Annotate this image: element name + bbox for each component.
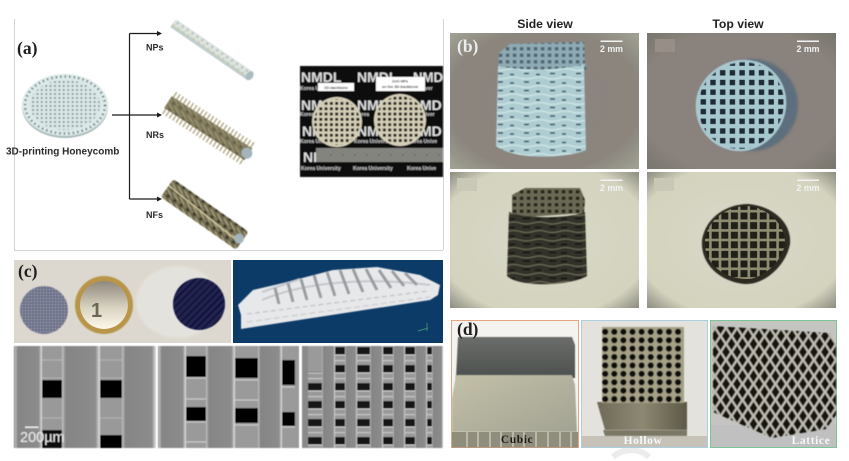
scale bar: 2 mm (797, 44, 820, 54)
photo: samples beside a coin: 1 (91, 300, 102, 322)
panel a frame (14, 19, 444, 250)
NRs label: NRs (146, 130, 164, 140)
photo: lattice sample (710, 320, 836, 448)
photo: NMDL printed disks: NM (301, 97, 323, 113)
caption: Lattice: Lattice (792, 435, 830, 447)
scale bar: 2 mm (600, 44, 623, 54)
photo: NMDL printed disks: Univer (417, 86, 433, 92)
photo: NMDL printed disks: NI (303, 149, 317, 165)
panel: a, synthesis schematic (6, 19, 444, 251)
photo: NMDL printed disks: NMD (357, 123, 389, 139)
arrows: branching to three morphologies (112, 31, 162, 202)
photo: NMDL printed disks: ZnO NPs (392, 80, 408, 84)
panel: c, printed samples and micrographs (14, 260, 443, 448)
photo: NMDL printed disks: Korea University (300, 139, 340, 145)
icon: honeycomb disk (22, 74, 108, 138)
photo: NMDL printed disks: MD (420, 123, 442, 139)
photo: NMDL printed disks: Korea (300, 112, 314, 118)
scale bar: 200 micrometres: 200µm (20, 430, 65, 446)
photo: blue lattice, top view (647, 33, 836, 169)
photo: NMDL printed disks: Korea Unive (407, 166, 436, 172)
photo: NMDL printed disks: NMDL (301, 69, 342, 85)
icon: nanoparticle rod (170, 19, 255, 82)
photo: NMDL printed disks: NMDL (357, 69, 398, 85)
photo: NMDL printed disks: MD (420, 97, 442, 113)
micrograph: lowest density (14, 346, 156, 448)
icon: nanorod brush (161, 91, 259, 167)
photo: NMDL printed disks: Univer (419, 112, 435, 118)
image: tomography render (233, 260, 443, 343)
watermark arc (613, 450, 649, 457)
scale bar: 2 mm (797, 183, 820, 193)
panel: b, side and top views (450, 17, 836, 308)
panel: d, cubic, hollow and lattice samples (452, 319, 836, 448)
photo: NMDL printed disks: Korea (355, 112, 369, 118)
photo: NMDL printed disks: Korea Unive (408, 139, 437, 145)
photo: NMDL printed disks: Korea University (353, 166, 393, 172)
panel label c: (c) (18, 261, 38, 281)
photo: cubic sample (452, 319, 578, 448)
photo: hollow sample (582, 320, 708, 448)
panel label a: (a) (17, 38, 38, 58)
caption: Hollow: Hollow (624, 435, 662, 447)
heading: Top view: Top view (712, 17, 764, 31)
photo: NMDL printed disks (300, 66, 443, 177)
scale bar: 2 mm (600, 183, 623, 193)
photo: NMDL printed disks: Korea University (354, 139, 394, 145)
photo: NMDL printed disks: Korea Univ (300, 86, 327, 92)
NPs label: NPs (146, 42, 164, 52)
photo: dark lattice, top view (647, 172, 836, 308)
caption: Cubic: Cubic (501, 434, 533, 446)
photo: NMDL printed disks: NMD (413, 69, 443, 85)
photo: blue lattice, side view (450, 33, 639, 169)
photo: NMDL printed disks: 3D-backbone (324, 86, 348, 90)
photo: NMDL printed disks: NMD (357, 97, 389, 113)
heading: Side view: Side view (517, 17, 573, 31)
NFs label: NFs (146, 210, 163, 220)
photo: NMDL printed disks: NM (302, 123, 324, 139)
icon: nanoflake rod (161, 179, 249, 250)
panel label b: (b) (457, 36, 479, 56)
disk caption: 3D-printing Honeycomb (6, 146, 119, 158)
panel label d: (d) (457, 319, 479, 339)
photo: NMDL printed disks: on the 3D-backbone (382, 85, 418, 89)
micrograph: highest density (302, 346, 443, 448)
photo: samples beside a coin (14, 260, 231, 343)
micrograph: medium density (158, 346, 299, 448)
photo: dark lattice, side view (450, 172, 639, 308)
photo: NMDL printed disks: Korea University (301, 166, 341, 172)
